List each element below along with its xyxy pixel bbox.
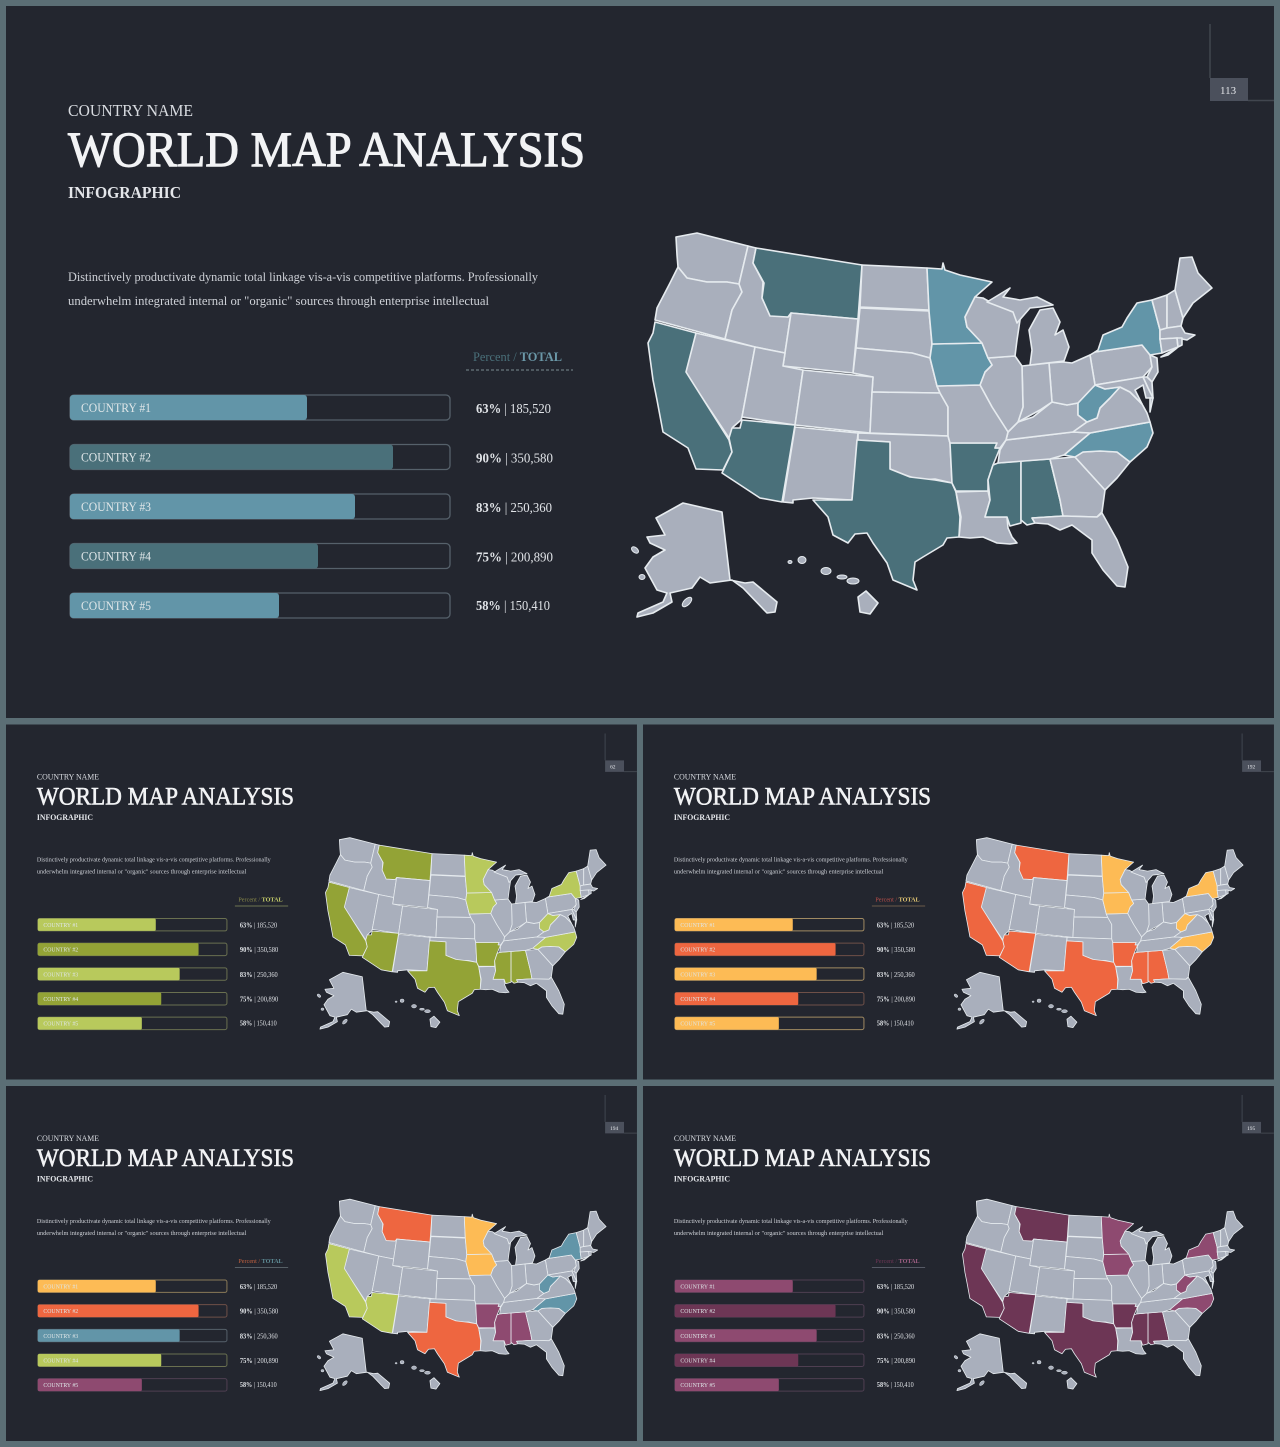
- bar row 1: [38, 1280, 278, 1292]
- bar row 1: 63% | 185,520: [240, 921, 278, 929]
- bar row 1: 63% | 185,520: [877, 1283, 915, 1291]
- US map: green: [317, 838, 606, 1029]
- bar row 5: 58% | 150,410: [240, 1020, 277, 1028]
- page number badge: 194: [610, 1126, 619, 1132]
- US map: blue: [630, 233, 1212, 617]
- bar row 3: [675, 1329, 915, 1342]
- bar row 1: COUNTRY #1: [680, 922, 715, 929]
- bar row 4: 75% | 200,890: [476, 550, 553, 566]
- bar row 2: [38, 943, 279, 956]
- bar row 3: 83% | 250,360: [240, 1332, 278, 1340]
- bar row 4: 75% | 200,890: [877, 995, 916, 1003]
- bar row 1: COUNTRY #1: [43, 1283, 78, 1290]
- bar row 4: COUNTRY #4: [680, 996, 716, 1003]
- bar row 5: 58% | 150,410: [877, 1381, 914, 1389]
- column header: [466, 349, 573, 370]
- US map: purple: [954, 1199, 1243, 1391]
- bar row 3: COUNTRY #3: [81, 500, 151, 514]
- description: [674, 1218, 908, 1237]
- title: WORLD MAP ANALYSIS: [674, 1145, 931, 1172]
- overline: country name: COUNTRY NAME: [37, 771, 99, 781]
- page number badge: [605, 733, 637, 772]
- bar row 2: COUNTRY #2: [43, 1308, 78, 1315]
- bar row 4: 75% | 200,890: [240, 1357, 279, 1365]
- description: underwhelm integrated internal or "organic" sources through enterprise intellectual: [37, 1230, 247, 1237]
- bar row 2: 90% | 350,580: [240, 946, 279, 954]
- panel: main blue slide: [6, 6, 1274, 718]
- subtitle: INFOGRAPHIC: [37, 812, 93, 822]
- bar row 1: [70, 395, 551, 420]
- column header: Percent / TOTAL: [473, 349, 562, 364]
- bar row 3: COUNTRY #3: [680, 971, 715, 978]
- bar row 2: COUNTRY #2: [81, 450, 151, 464]
- title: WORLD MAP ANALYSIS: [674, 783, 931, 810]
- bar row 5: COUNTRY #5: [43, 1021, 78, 1028]
- panel: multicolour slide: [6, 1086, 637, 1441]
- description: [37, 1218, 271, 1237]
- bar row 1: [675, 1280, 915, 1292]
- description: underwhelm integrated internal or "organic" sources through enterprise intellectual: [68, 293, 489, 308]
- overline: country name: COUNTRY NAME: [674, 771, 736, 781]
- bar row 5: [38, 1017, 277, 1030]
- bar row 4: COUNTRY #4: [43, 1357, 79, 1364]
- description: Distinctively productivate dynamic total linkage vis-a-vis competitive platforms. Professionally: [674, 1218, 908, 1225]
- page number badge: [1210, 24, 1274, 101]
- bar row 3: [675, 968, 915, 980]
- bar row 5: COUNTRY #5: [43, 1382, 78, 1389]
- description: Distinctively productivate dynamic total linkage vis-a-vis competitive platforms. Professionally: [68, 269, 538, 284]
- bar row 3: 83% | 250,360: [240, 971, 278, 979]
- US map: multicolour: [317, 1199, 606, 1391]
- panel: orange slide: [643, 725, 1274, 1080]
- bar row 3: 83% | 250,360: [877, 1332, 915, 1340]
- bar row 4: [38, 1354, 279, 1366]
- description: Distinctively productivate dynamic total linkage vis-a-vis competitive platforms. Professionally: [37, 857, 271, 864]
- bar row 5: COUNTRY #5: [680, 1021, 715, 1028]
- description: [674, 857, 908, 876]
- bar row 2: [38, 1305, 279, 1317]
- subtitle: INFOGRAPHIC: [674, 812, 730, 822]
- column header: Percent / TOTAL: [875, 896, 920, 904]
- bar row 3: [38, 968, 278, 980]
- bar row 2: [70, 444, 553, 470]
- bar row 2: 90% | 350,580: [240, 1308, 279, 1316]
- bar row 2: 90% | 350,580: [877, 1308, 916, 1316]
- subtitle: INFOGRAPHIC: [674, 1174, 730, 1184]
- column header: [872, 896, 925, 906]
- description: underwhelm integrated internal or "organic" sources through enterprise intellectual: [674, 869, 884, 876]
- bar row 2: 90% | 350,580: [877, 946, 916, 954]
- page number badge: [1242, 733, 1274, 772]
- bar row 4: [70, 544, 553, 568]
- bar row 4: 75% | 200,890: [877, 1357, 916, 1365]
- title: WORLD MAP ANALYSIS: [37, 1145, 294, 1172]
- bar row 3: 83% | 250,360: [476, 501, 552, 516]
- bar row 2: 90% | 350,580: [476, 452, 553, 466]
- bar row 5: COUNTRY #5: [680, 1382, 715, 1389]
- bar row 3: COUNTRY #3: [43, 971, 78, 978]
- description: underwhelm integrated internal or "organic" sources through enterprise intellectual: [674, 1230, 884, 1237]
- bar row 4: COUNTRY #4: [680, 1357, 716, 1364]
- bar row 1: 63% | 185,520: [877, 921, 915, 929]
- bar row 4: [675, 1354, 916, 1366]
- bar row 5: [38, 1379, 277, 1391]
- panel: purple slide: [643, 1086, 1274, 1441]
- description: [37, 857, 271, 876]
- bar row 4: [38, 992, 279, 1005]
- bar row 2: [675, 1305, 916, 1317]
- description: Distinctively productivate dynamic total linkage vis-a-vis competitive platforms. Professionally: [674, 857, 908, 864]
- bar row 5: 58% | 150,410: [240, 1381, 277, 1389]
- overline: country name: COUNTRY NAME: [68, 101, 193, 120]
- bar row 1: 63% | 185,520: [240, 1283, 278, 1291]
- bar row 3: COUNTRY #3: [680, 1333, 715, 1340]
- bar row 5: 58% | 150,410: [476, 599, 550, 614]
- column header: Percent / TOTAL: [238, 1258, 283, 1265]
- bar row 3: COUNTRY #3: [43, 1333, 78, 1340]
- page number badge: 195: [1247, 1126, 1256, 1132]
- overline: country name: COUNTRY NAME: [37, 1133, 99, 1143]
- bar row 5: 58% | 150,410: [877, 1020, 914, 1028]
- column header: [235, 1258, 288, 1267]
- bar row 5: COUNTRY #5: [81, 599, 151, 613]
- bar row 2: COUNTRY #2: [680, 947, 715, 954]
- description: Distinctively productivate dynamic total linkage vis-a-vis competitive platforms. Professionally: [37, 1218, 271, 1225]
- page number badge: [1242, 1095, 1274, 1133]
- page number badge: 192: [1247, 764, 1256, 770]
- bar row 2: COUNTRY #2: [43, 947, 78, 954]
- column header: Percent / TOTAL: [238, 896, 283, 904]
- bar row 2: COUNTRY #2: [680, 1308, 715, 1315]
- page number badge: 62: [610, 764, 616, 770]
- page number badge: [605, 1095, 637, 1133]
- column header: [235, 896, 288, 906]
- bar row 1: COUNTRY #1: [81, 401, 151, 415]
- bar row 5: [675, 1017, 914, 1030]
- bar row 2: [675, 943, 916, 956]
- bar row 3: [70, 494, 552, 519]
- bar row 4: [675, 992, 916, 1005]
- page number badge: 113: [1220, 85, 1237, 97]
- bar row 1: COUNTRY #1: [680, 1283, 715, 1290]
- bar row 4: 75% | 200,890: [240, 995, 279, 1003]
- bar row 1: [675, 918, 915, 931]
- bar row 1: COUNTRY #1: [43, 922, 78, 929]
- bar row 5: [675, 1379, 914, 1391]
- description: [68, 269, 538, 308]
- bar row 3: 83% | 250,360: [877, 971, 915, 979]
- bar row 4: COUNTRY #4: [43, 996, 79, 1003]
- title: WORLD MAP ANALYSIS: [37, 783, 294, 810]
- description: underwhelm integrated internal or "organic" sources through enterprise intellectual: [37, 869, 247, 876]
- column header: [872, 1258, 925, 1267]
- US map: orange: [954, 838, 1243, 1029]
- bar row 1: 63% | 185,520: [476, 402, 551, 417]
- column header: Percent / TOTAL: [875, 1258, 920, 1265]
- bar row 3: [38, 1329, 278, 1342]
- bar row 5: [70, 593, 550, 618]
- overline: country name: COUNTRY NAME: [674, 1133, 736, 1143]
- bar row 1: [38, 918, 278, 931]
- subtitle: INFOGRAPHIC: [37, 1174, 93, 1184]
- panel: green slide: [6, 725, 637, 1080]
- title: WORLD MAP ANALYSIS: [68, 121, 585, 177]
- subtitle: INFOGRAPHIC: [68, 183, 181, 202]
- bar row 4: COUNTRY #4: [81, 550, 152, 564]
